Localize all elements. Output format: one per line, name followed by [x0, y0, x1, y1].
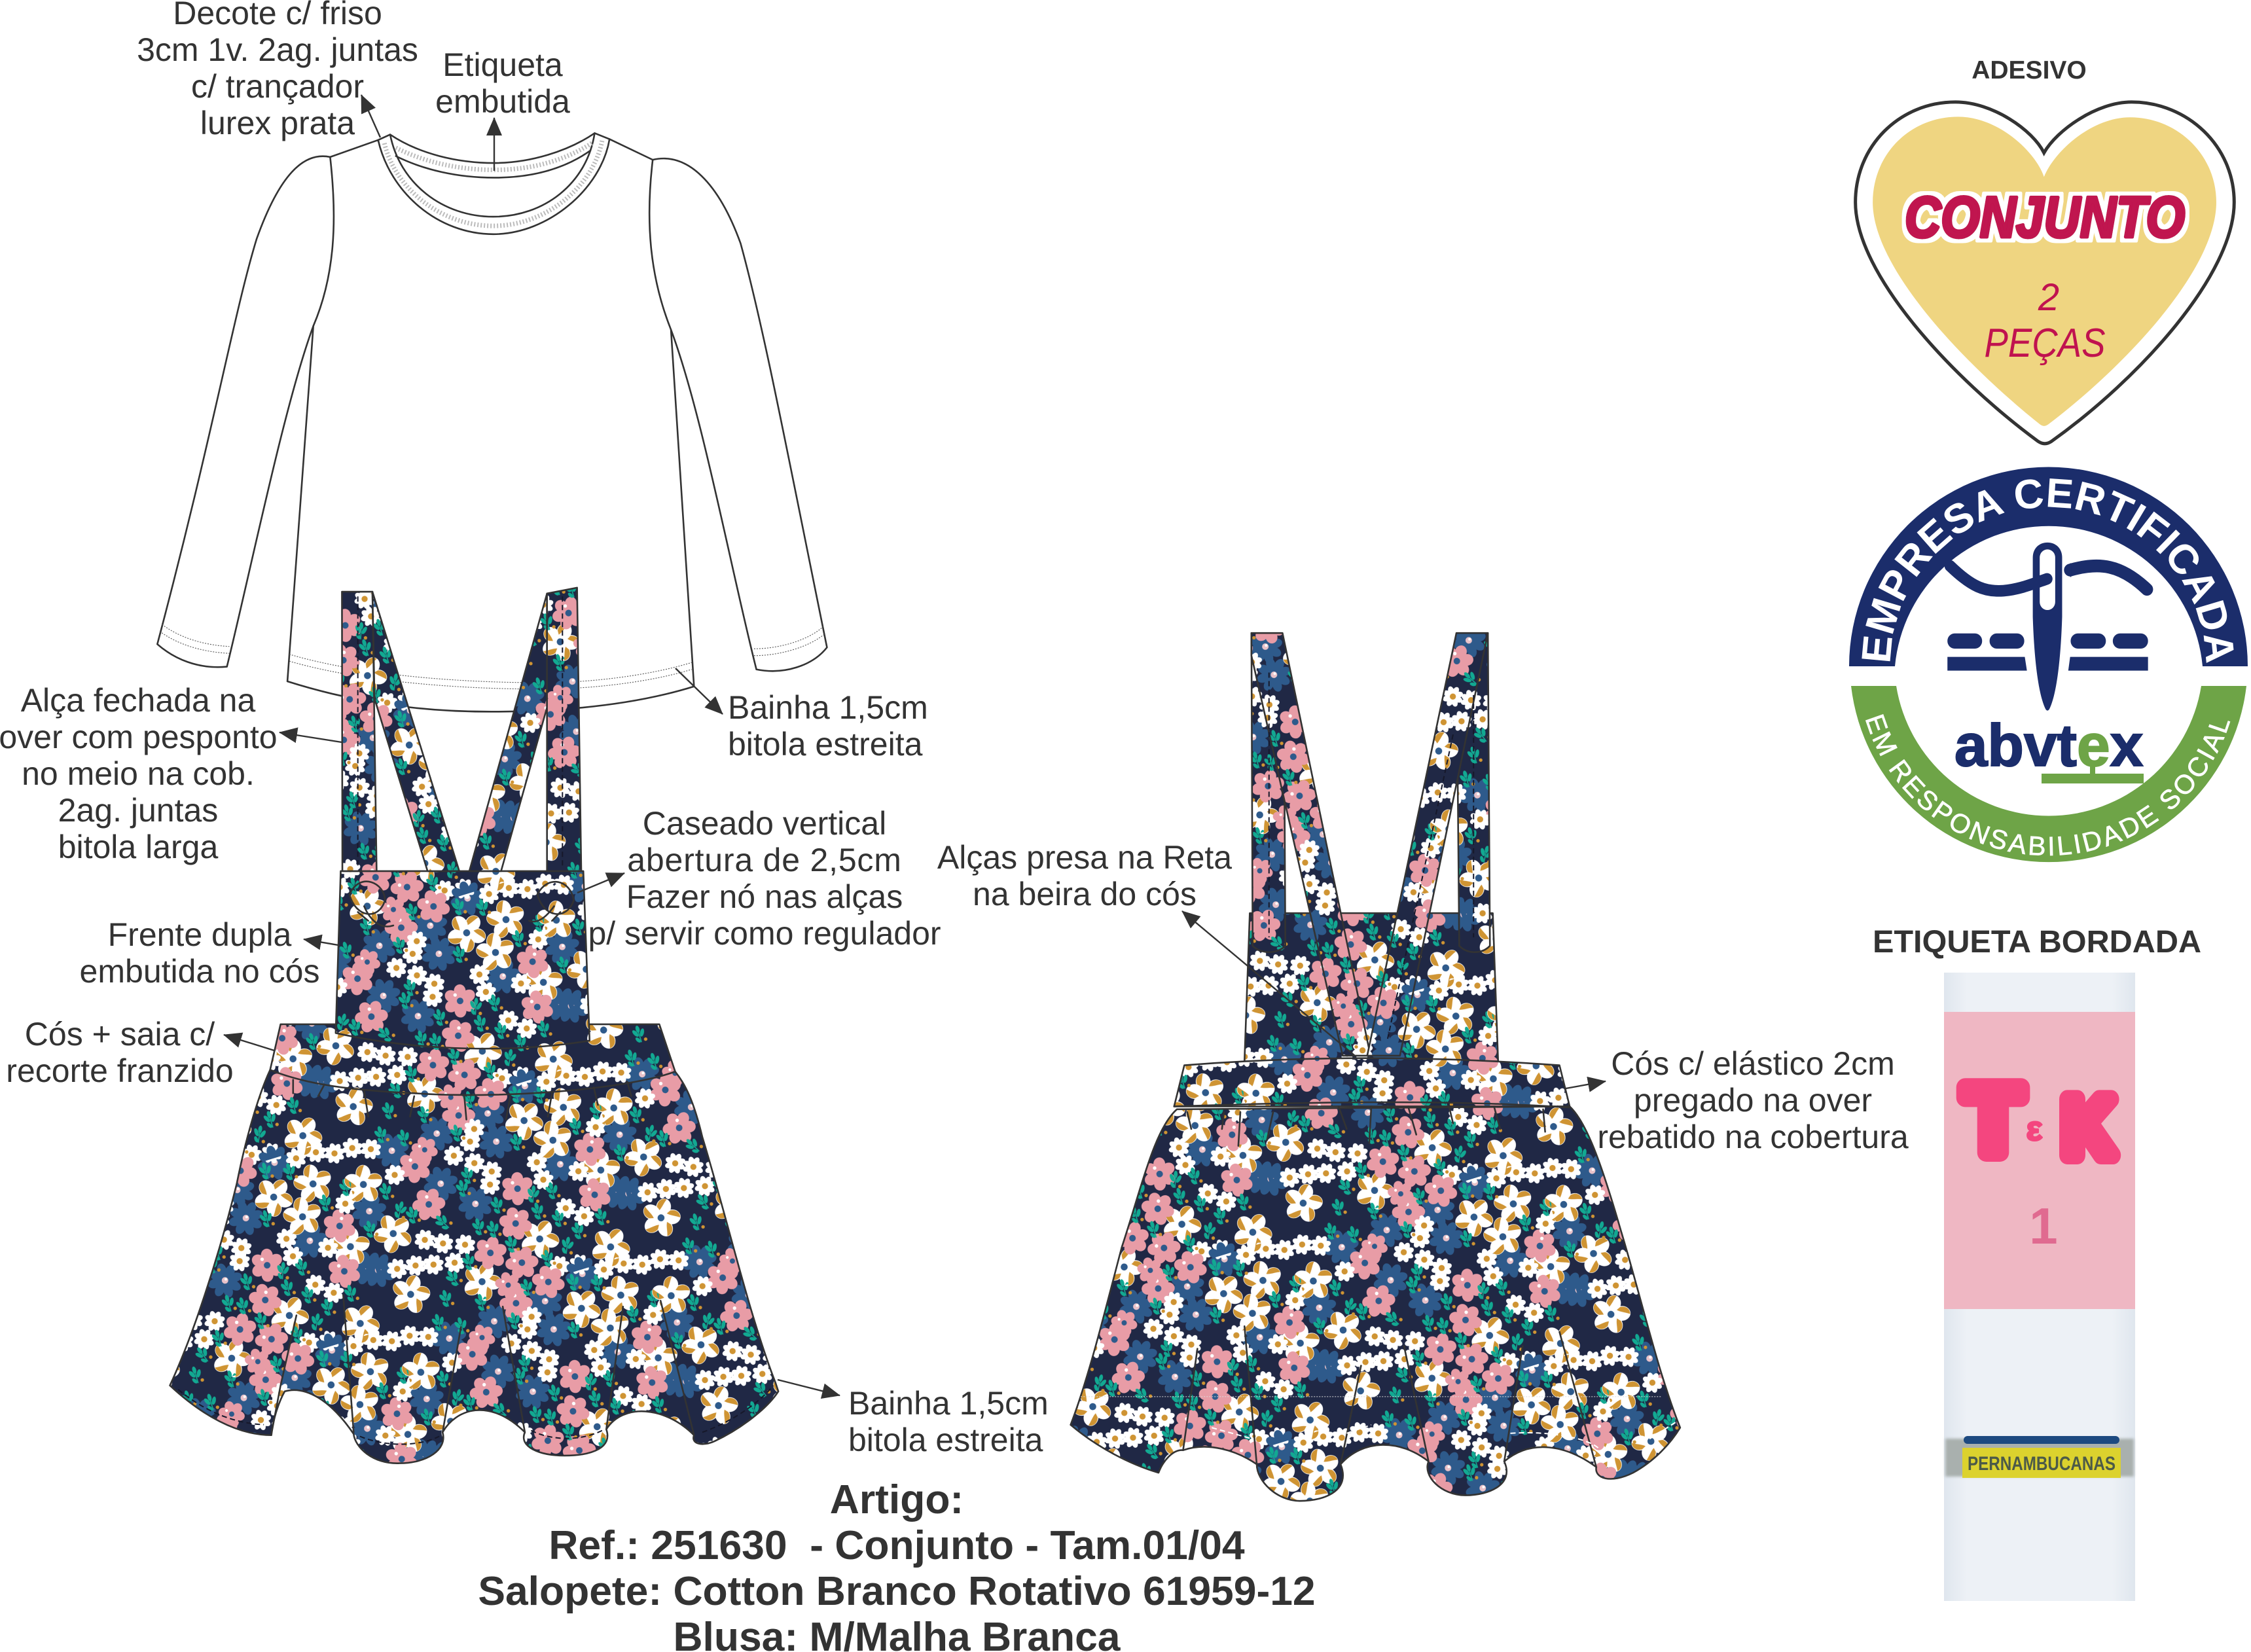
callout: bainha blusa: Bainha 1,5cm	[728, 689, 928, 726]
badge bottom text: EM RESPONSABILIDADE SOCIAL	[1865, 714, 2231, 856]
badge: abvtex certification	[1849, 467, 2248, 863]
callout: cós elástico: Cós c/ elástico 2cm	[1611, 1045, 1895, 1082]
callout: alça: over com pesponto	[0, 719, 278, 755]
callout: bainha saia: bitola estreita	[848, 1422, 1043, 1458]
label logo T&K: ε	[2026, 1110, 2042, 1148]
arrow: cós elástico	[1566, 1081, 1606, 1088]
heading: etiqueta bordada: ETIQUETA BORDADA	[1873, 924, 2201, 960]
front skirt	[170, 1070, 778, 1463]
front bib	[336, 871, 590, 1049]
strap stitching	[358, 596, 562, 868]
right diagonal strap	[469, 594, 547, 871]
label size number: 1	[2029, 1197, 2058, 1255]
back skirt folds	[1081, 1326, 1676, 1467]
callout: cós e saia: Cós + saia c/	[25, 1016, 215, 1052]
callout: cós elástico: pregado na over	[1634, 1082, 1872, 1119]
badge top arc	[1849, 467, 2248, 666]
callout: decote: 3cm 1v. 2ag. juntas	[137, 31, 418, 68]
blouse body and sleeves	[157, 139, 827, 711]
arrow: frente dupla	[304, 939, 338, 945]
back left diagonal strap	[1252, 633, 1371, 1056]
label logo T&K: T	[1964, 1067, 2022, 1173]
left diagonal strap	[372, 592, 459, 871]
blouse neckline trim	[378, 133, 609, 226]
icon: needle and stitches	[1947, 543, 2148, 711]
back right strap	[1457, 633, 1490, 952]
callout: frente dupla: Frente dupla	[108, 916, 292, 953]
arrow: etiqueta	[494, 118, 495, 171]
callout: alças presa: na beira do cós	[973, 876, 1197, 912]
callout: alça: bitola larga	[58, 829, 218, 865]
label base	[1944, 973, 2135, 1601]
back right diagonal strap	[1367, 633, 1488, 1056]
back left strap	[1252, 633, 1286, 952]
callout: alça: no meio na cob.	[22, 755, 255, 792]
sticker word: peças: PEÇAS	[1985, 321, 2105, 366]
heart fill	[1873, 117, 2216, 426]
callout: caseado: p/ servir como regulador	[588, 915, 941, 952]
callout: etiqueta embutida: Etiqueta	[442, 46, 563, 83]
arrow: decote	[361, 95, 380, 137]
arrow: bainha blusa	[675, 668, 723, 714]
front gathers	[293, 1080, 632, 1119]
back skirt	[1071, 1106, 1680, 1501]
arrow: alça	[279, 732, 342, 742]
callout: alça: 2ag. juntas	[58, 792, 218, 829]
back waistband	[1174, 1058, 1570, 1106]
arrow: alças presa	[1182, 911, 1355, 1056]
left strap	[342, 592, 376, 871]
garment: pinafore back	[1071, 633, 1680, 1501]
badge top text: EMPRESA CERTIFICADA	[1862, 478, 2233, 663]
article title block: Ref.: 251630 - Conjunto - Tam.01/04	[549, 1523, 1245, 1568]
callout: caseado: Caseado vertical	[643, 805, 886, 842]
sticker word: conjunto: CONJUNTO	[1905, 185, 2185, 249]
callout: caseado: Fazer nó nas alças	[626, 878, 903, 915]
front skirt folds and hem stitching	[178, 1295, 773, 1445]
callout: frente dupla: embutida no cós	[80, 953, 319, 990]
back bib	[1244, 913, 1498, 1062]
front waistband	[270, 1024, 675, 1095]
callout: etiqueta embutida: embutida	[435, 83, 570, 120]
woven label	[1944, 973, 2135, 1601]
label brand band: PERNAMBUCANAS	[1968, 1453, 2116, 1475]
arrow: caseado	[577, 873, 624, 893]
label brand band	[1945, 1436, 2134, 1478]
badge bottom arc	[1851, 686, 2246, 862]
blouse hem stitching	[160, 624, 825, 689]
label logo T&K: K	[2062, 1083, 2114, 1173]
strap knots	[350, 882, 574, 927]
label pink block	[1944, 1012, 2135, 1309]
elastic line and gathers	[1174, 1102, 1570, 1146]
callout: alças presa: Alças presa na Reta	[937, 839, 1232, 876]
wordmark underline	[2042, 764, 2144, 783]
article title block: Salopete: Cotton Branco Rotativo 61959-12	[478, 1569, 1316, 1614]
article title block: Artigo:	[830, 1477, 963, 1522]
callout: caseado: abertura de 2,5cm	[627, 842, 902, 878]
callout: cós elástico: rebatido na cobertura	[1597, 1119, 1909, 1155]
heading: adesivo: ADESIVO	[1972, 56, 2087, 84]
callout: bainha blusa: bitola estreita	[728, 726, 923, 763]
blouse armhole seams	[314, 157, 671, 330]
heart outline	[1856, 102, 2234, 444]
sticker: heart	[1856, 102, 2234, 444]
arrow: bainha saia	[778, 1380, 840, 1395]
label logo T&K	[1964, 1067, 2114, 1173]
callout: cós e saia: recorte franzido	[6, 1052, 234, 1089]
callout: bainha saia: Bainha 1,5cm	[848, 1385, 1049, 1422]
callout: decote: c/ trançador	[191, 68, 364, 105]
badge wordmark: abvtex	[1954, 713, 2143, 779]
right strap	[547, 588, 581, 871]
garment: pinafore front	[170, 588, 778, 1463]
back strap stitching	[1269, 672, 1473, 1039]
arrow: cós e saia	[224, 1035, 274, 1050]
callout: decote: lurex prata	[200, 105, 355, 141]
callout: alça: Alça fechada na	[21, 682, 255, 719]
sticker number: 2	[2038, 276, 2059, 319]
garment: long-sleeve blouse	[157, 133, 827, 711]
